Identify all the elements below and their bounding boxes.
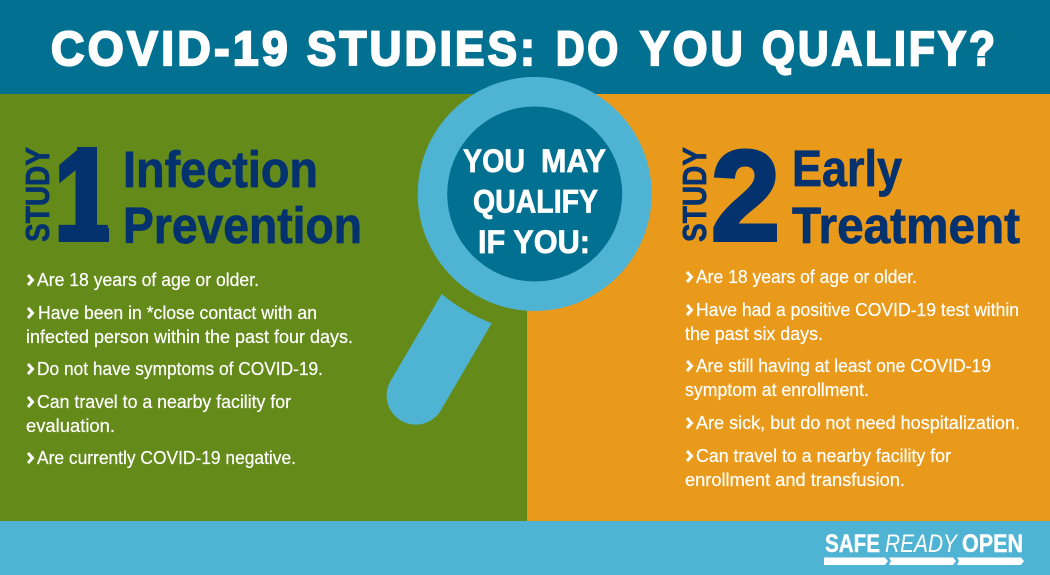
text block: study 1 criteria: Are 18 years of age or older. (37, 270, 259, 290)
title: COVID-19 (51, 23, 291, 76)
text block: study 1 criteria: Have been in *close contact with an (38, 303, 317, 323)
text block: study 2 criteria: symptom at enrollment. (685, 380, 869, 400)
callout: you may qualify if you: MAY (541, 143, 606, 179)
panel: study 1 background (0, 94, 527, 521)
text block: study 2 criteria: Are sick, but do not need hospitalization. (696, 413, 1020, 433)
heading: study 2 early treatment (676, 125, 1020, 268)
text block: study 2 criteria (685, 267, 1020, 490)
title: DO (556, 23, 621, 76)
panel: study 2 background (527, 94, 1050, 521)
heading: study 1 infection prevention (19, 125, 362, 268)
heading: study 2 early treatment: Early (792, 140, 903, 197)
heading: study 2 early treatment: STUDY (676, 147, 713, 242)
text block: study 1 criteria: infected person within the past four days. (26, 327, 353, 347)
header band (0, 0, 1050, 94)
title: QUALIFY? (762, 23, 998, 76)
title: STUDIES: (307, 23, 538, 76)
icon: magnifying glass (387, 77, 652, 425)
text block: study 2 criteria: the past six days. (685, 324, 823, 344)
heading: study 1 infection prevention: STUDY (19, 147, 56, 242)
text block: study 1 criteria: evaluation. (26, 416, 115, 436)
text block: study 2 criteria: Are still having at least one COVID-19 (696, 356, 991, 376)
callout: you may qualify if you: QUALIFY (473, 184, 598, 220)
footer band (0, 521, 1050, 575)
callout: you may qualify if you (463, 143, 606, 260)
heading: study 2 early treatment: 2 (711, 125, 780, 268)
callout: you may qualify if you: YOU (463, 143, 525, 179)
title (51, 23, 998, 76)
logo: safe ready open: SAFE (825, 530, 880, 558)
text block: study 2 criteria: Have had a positive COVID-19 test within (696, 300, 1019, 320)
heading: study 1 infection prevention: 1 (54, 125, 109, 268)
text block: study 1 criteria (26, 270, 353, 468)
text block: study 1 criteria: Are currently COVID-19 negative. (37, 448, 296, 468)
heading: study 2 early treatment: Treatment (792, 197, 1020, 254)
text block: study 1 criteria: Can travel to a nearby facility for (37, 392, 291, 412)
heading: study 1 infection prevention: Infection (123, 141, 318, 198)
text block: study 2 criteria: enrollment and transfusion. (685, 470, 905, 490)
logo: safe ready open: OPEN (962, 530, 1023, 558)
text block: study 2 criteria: Can travel to a nearby facility for (696, 446, 951, 466)
text block: study 1 criteria: Do not have symptoms of COVID-19. (37, 359, 323, 379)
logo: safe ready open (824, 530, 1024, 565)
callout: you may qualify if you: IF YOU: (478, 224, 590, 260)
text block: study 2 criteria: Are 18 years of age or older. (696, 267, 917, 287)
heading: study 1 infection prevention: Prevention (123, 197, 362, 254)
title: YOU (640, 23, 746, 76)
logo: safe ready open: READY (885, 530, 959, 558)
